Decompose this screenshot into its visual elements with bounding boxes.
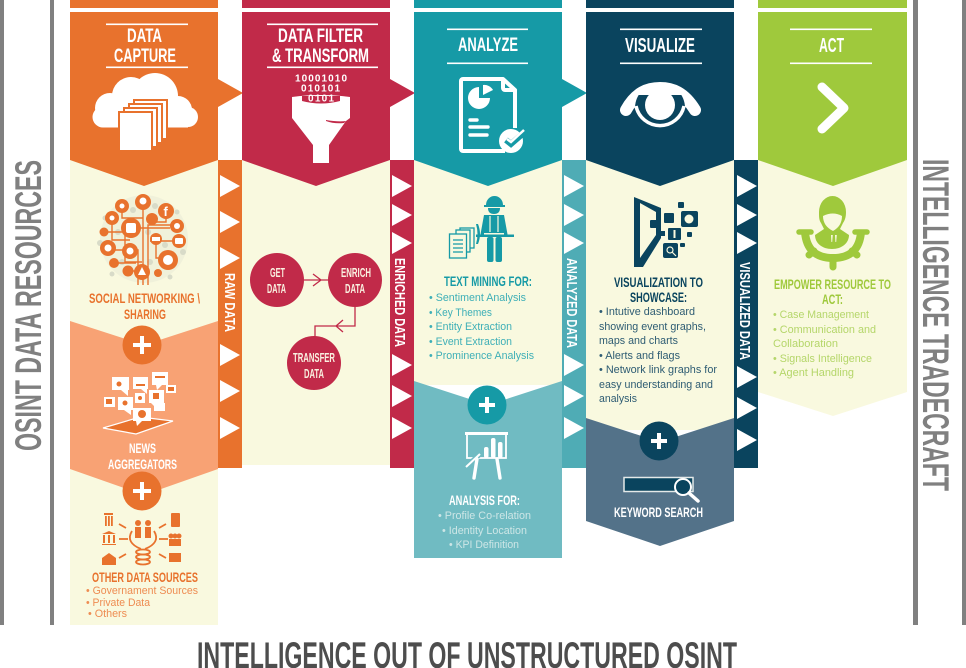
header: visualize: VISUALIZE <box>625 35 695 57</box>
header: data capture: CAPTURE <box>114 45 176 67</box>
column 1: data capture <box>70 0 243 625</box>
text: analysis for: • KPI Definition <box>449 539 519 551</box>
node: enrich data <box>328 253 382 307</box>
icon: social network tree: f <box>164 204 168 219</box>
text: other data sources: • Others <box>88 608 127 620</box>
strip: raw data <box>218 160 242 468</box>
list: visualization items: • Network link graphs for <box>599 364 717 376</box>
strip: analyzed data <box>562 160 586 468</box>
header: data filter & transform: & TRANSFORM <box>272 45 369 67</box>
header: visualize <box>586 12 734 186</box>
right side panel: intelligence tradecraft <box>913 0 966 625</box>
header: data filter & transform <box>242 12 415 186</box>
strip: enriched data: ENRICHED DATA <box>391 258 407 347</box>
node: transfer data: DATA <box>304 367 324 381</box>
list: visualization items: • Intutive dashboard <box>599 306 695 318</box>
heading: empower resource to act: ACT: <box>822 291 843 307</box>
strip: analyzed data: ANALYZED DATA <box>563 258 579 348</box>
node: get data: GET <box>270 266 285 280</box>
column 3: analyze <box>414 0 587 558</box>
heading: text mining for: TEXT MINING FOR: <box>444 273 532 289</box>
text: other data sources: • Private Data <box>86 597 151 609</box>
icon: report with checkmark <box>461 79 526 153</box>
heading: empower resource to act: EMPOWER RESOURCE TO <box>774 276 891 292</box>
icon: eye <box>626 83 695 133</box>
diagram: process flow <box>250 253 382 390</box>
list: visualization items: analysis <box>599 393 637 405</box>
icon: search bar with magnifier <box>624 478 698 501</box>
list: text mining items: • Key Themes <box>429 307 492 319</box>
text: other data sources: • Governament Sources <box>86 585 198 597</box>
text: analysis for <box>438 492 531 551</box>
label: news aggregators: NEWS <box>129 440 156 456</box>
icon: tablet with speech bubbles <box>103 372 176 434</box>
plus badge <box>640 422 678 460</box>
label: news aggregators: AGGREGATORS <box>108 456 177 472</box>
panel body <box>758 160 907 416</box>
band: keyword search <box>586 418 734 546</box>
band: analysis for <box>414 381 562 558</box>
heading: social networking <box>89 290 200 322</box>
header: act: ACT <box>819 35 844 57</box>
text: analysis for: ANALYSIS FOR: <box>449 492 520 508</box>
icon: funnel with binary digits <box>292 74 350 163</box>
strip: enriched data <box>390 160 414 468</box>
icon: door with data tiles <box>634 197 698 267</box>
column 2: data filter and transform <box>242 0 415 465</box>
plus badge <box>468 386 506 424</box>
list: visualization items <box>599 306 717 405</box>
node: get data <box>250 253 304 307</box>
column 5: act <box>758 0 907 416</box>
list: act items: • Agent Handling <box>773 367 854 379</box>
list: text mining items <box>429 292 534 362</box>
text: other data sources <box>86 569 198 620</box>
list: act items <box>773 309 876 379</box>
list: act items: • Communication and <box>773 324 876 336</box>
header: analyze <box>414 12 587 186</box>
heading: empower resource to act <box>774 276 891 307</box>
list: act items: • Signals Intelligence <box>773 353 872 365</box>
icon: miner with documents <box>450 196 514 262</box>
icon: social network tree <box>97 194 188 285</box>
heading: visualization to showcase <box>614 274 703 305</box>
left side panel: OSINT data resources: OSINT DATA RESOURCES <box>8 160 49 451</box>
label: news aggregators <box>108 440 177 472</box>
text: other data sources: OTHER DATA SOURCES <box>92 569 198 585</box>
header: data filter & transform: DATA FILTER <box>278 25 363 47</box>
node: transfer data: TRANSFER <box>293 351 335 365</box>
header: data capture: DATA <box>127 25 162 47</box>
list: visualization items: maps and charts <box>599 335 678 347</box>
icon: funnel with binary digits: 010101 <box>301 84 340 94</box>
list: visualization items: • Alerts and flags <box>599 350 680 362</box>
icon: funnel with binary digits: 10001010 <box>295 74 347 84</box>
plus badge <box>122 472 162 510</box>
icon: presentation board <box>465 434 508 478</box>
strip: visualized data <box>734 160 758 468</box>
icon: other data sources <box>102 513 182 565</box>
node: enrich data: DATA <box>345 282 365 296</box>
strip: visualized data: VISUALIZED DATA <box>736 262 752 360</box>
node: get data: DATA <box>267 282 286 296</box>
node: transfer data <box>287 336 341 390</box>
heading: visualization to showcase: VISUALIZATION TO <box>614 274 703 290</box>
plus badge <box>122 326 162 364</box>
list: act items: • Case Management <box>773 309 869 321</box>
icon: chevron <box>822 87 844 129</box>
text: analysis for: • Profile Co-relation <box>438 510 531 522</box>
icon: person with ship wheel <box>799 196 867 267</box>
heading: visualization to showcase: SHOWCASE: <box>630 289 687 305</box>
node: enrich data: ENRICH <box>341 266 371 280</box>
strip: raw data: RAW DATA <box>221 273 237 332</box>
left side panel: OSINT data resources <box>0 0 54 625</box>
header: data capture <box>70 12 243 186</box>
list: text mining items: • Entity Extraction <box>429 321 512 333</box>
label: keyword search: KEYWORD SEARCH <box>614 504 703 520</box>
column 4: visualize <box>586 0 734 546</box>
heading: social networking: SHARING <box>124 306 166 322</box>
header: act <box>758 12 907 186</box>
header: analyze: ANALYZE <box>458 34 518 56</box>
icon: funnel with binary digits: 0101 <box>308 94 334 104</box>
list: act items: Collaboration <box>773 338 838 350</box>
list: text mining items: • Event Extraction <box>429 336 512 348</box>
list: text mining items: • Prominence Analysis <box>429 350 534 362</box>
band: news aggregators <box>70 321 218 495</box>
text: analysis for: • Identity Location <box>442 525 527 537</box>
icon: cloud with documents <box>92 73 198 151</box>
list: text mining items: • Sentiment Analysis <box>429 292 526 304</box>
list: visualization items: showing event graphs, <box>599 321 706 333</box>
list: visualization items: easy understanding and <box>599 379 713 391</box>
heading: social networking: SOCIAL NETWORKING \ <box>89 290 200 306</box>
